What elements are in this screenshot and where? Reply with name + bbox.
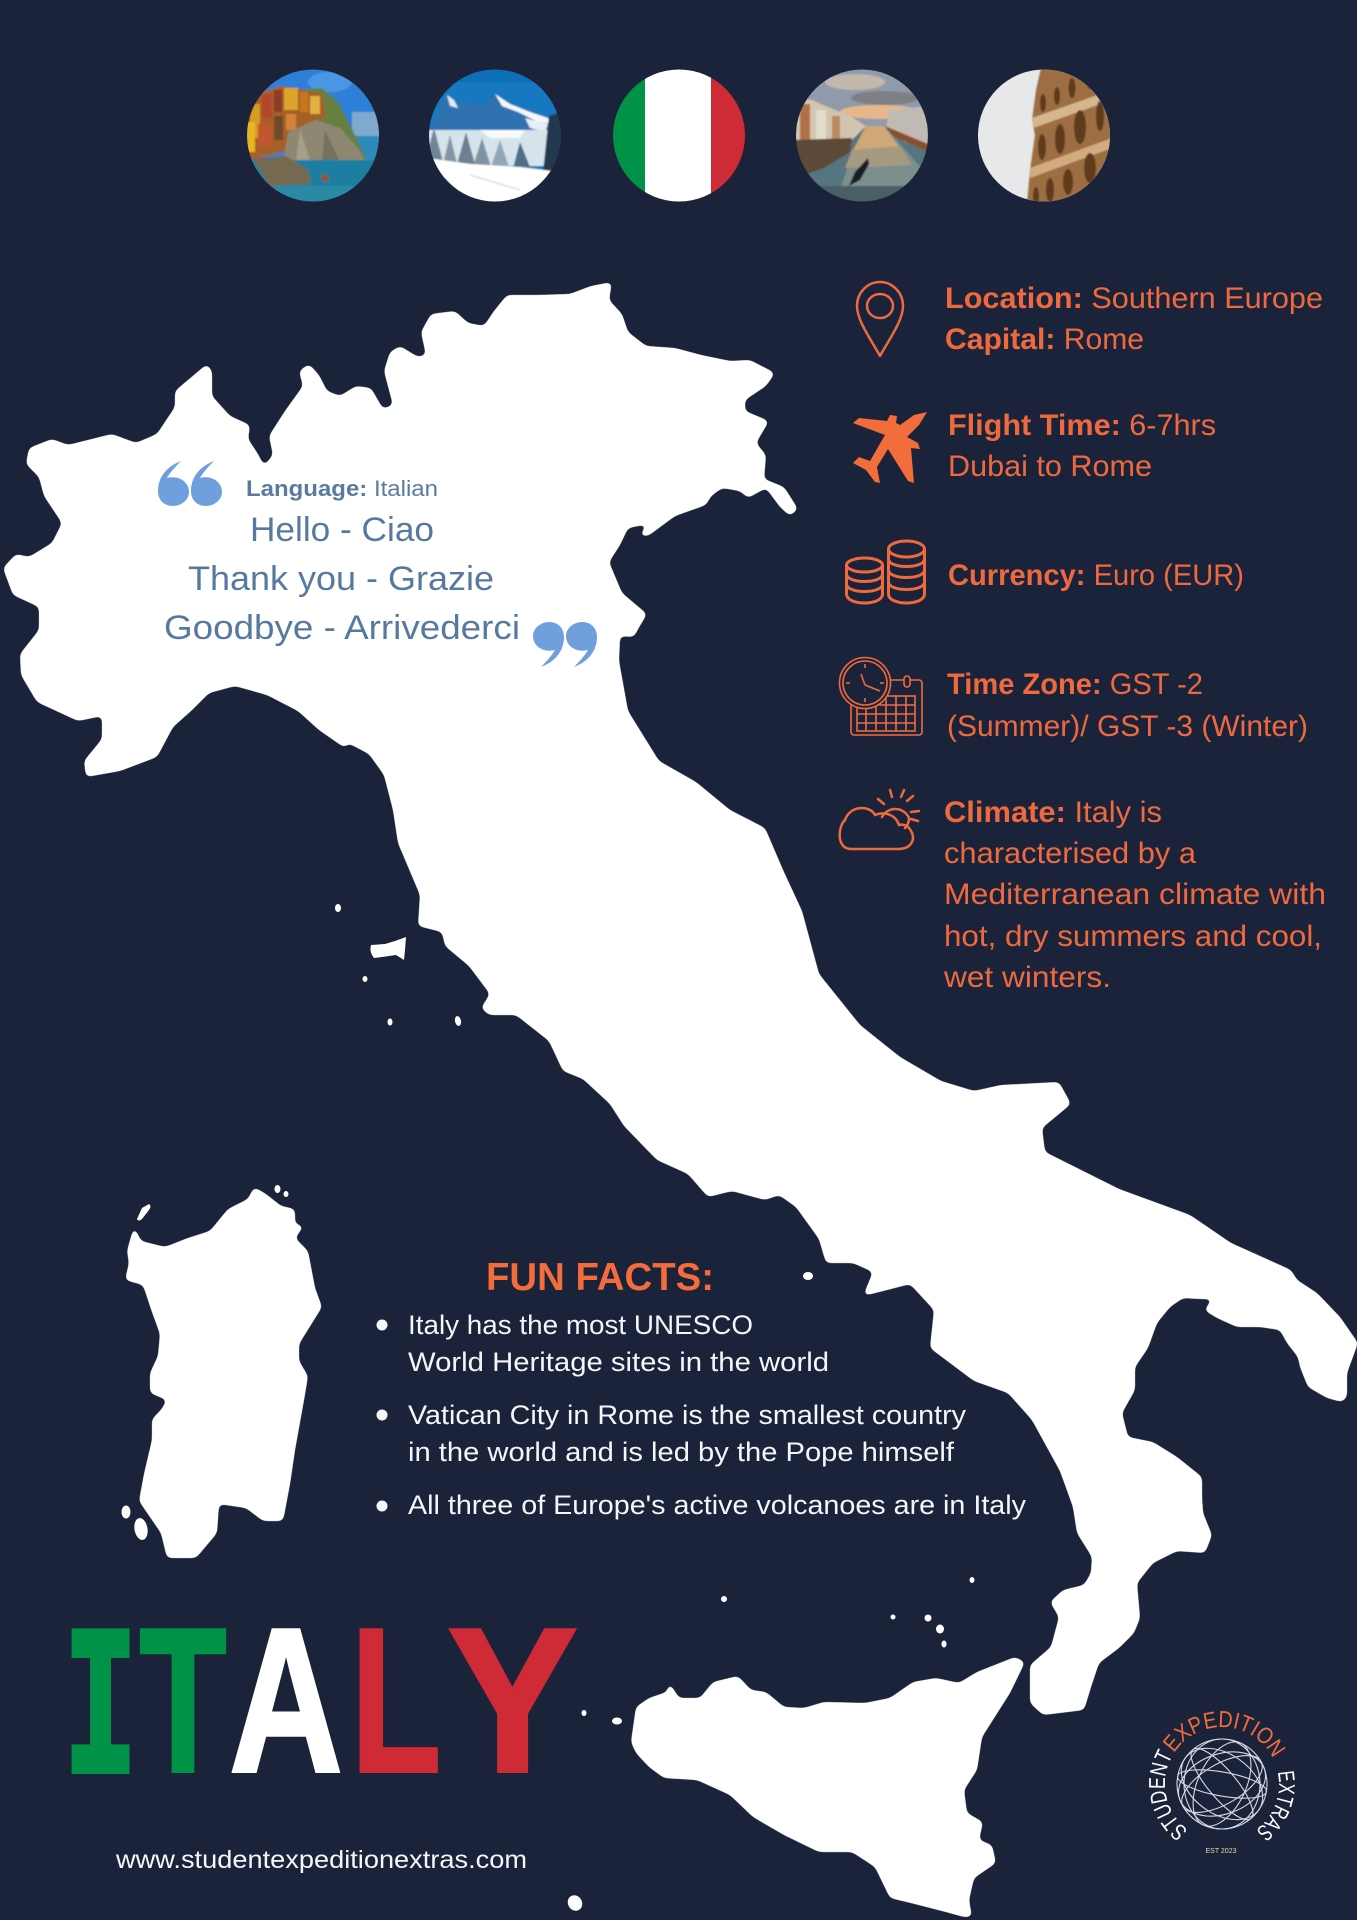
climate text: hot, dry summers and cool, bbox=[944, 920, 1322, 953]
circle: Colosseum bbox=[978, 70, 1110, 202]
circle: snowy mountains bbox=[429, 70, 561, 202]
circle: Cinque Terre village bbox=[247, 70, 379, 202]
title: ITALY: I bbox=[64, 1594, 137, 1835]
Sicily bbox=[631, 1657, 1025, 1917]
photo circles row bbox=[247, 70, 1110, 202]
facts column bbox=[840, 282, 1326, 994]
icon: cloud and sun bbox=[840, 790, 919, 849]
logo: Student Expedition Extras bbox=[1149, 1711, 1295, 1855]
title: ITALY: T bbox=[139, 1584, 227, 1816]
small islands bbox=[122, 904, 974, 1913]
title: ITALY: A bbox=[229, 1585, 343, 1815]
icon: coin stacks bbox=[846, 541, 924, 603]
flight time text: Dubai to Rome bbox=[948, 450, 1152, 483]
circle: Italian flag bbox=[613, 70, 745, 202]
thank you phrase: Thank you - Grazie bbox=[188, 560, 494, 598]
time zone text: Time Zone: GST -2 bbox=[947, 668, 1203, 701]
Sardinia bbox=[125, 1187, 322, 1558]
climate text: characterised by a bbox=[944, 837, 1196, 870]
title: ITALY: Y bbox=[447, 1585, 578, 1816]
closing quote mark bbox=[533, 622, 597, 667]
currency text: Currency: Euro (EUR) bbox=[948, 559, 1244, 592]
climate text: Climate: Italy is bbox=[944, 796, 1162, 829]
bullet: Vatican City: Vatican City in Rome is the smallest country bbox=[408, 1400, 967, 1430]
hello phrase: Hello - Ciao bbox=[250, 511, 434, 549]
icon: wireframe globe bbox=[1168, 1733, 1276, 1835]
bullet: Vatican City bbox=[376, 1400, 967, 1467]
fun facts heading: FUN FACTS: bbox=[486, 1256, 714, 1299]
climate text: Mediterranean climate with bbox=[944, 878, 1326, 911]
bullet: UNESCO: World Heritage sites in the world bbox=[408, 1347, 829, 1377]
location and capital text: Location: Southern Europe bbox=[945, 282, 1323, 315]
logo word: student: STUDENT bbox=[1149, 1748, 1186, 1840]
title: ITALY bbox=[64, 1584, 578, 1835]
language line: Language: Italian bbox=[246, 476, 438, 501]
circle: Venice canal bbox=[796, 70, 928, 202]
icon: aeroplane bbox=[853, 412, 927, 483]
bullet: UNESCO bbox=[376, 1310, 829, 1377]
location and capital text bbox=[945, 282, 1323, 356]
opening quote mark bbox=[158, 461, 222, 506]
location and capital text: Capital: Rome bbox=[945, 323, 1144, 356]
climate text: wet winters. bbox=[943, 961, 1111, 994]
time zone text bbox=[947, 668, 1308, 743]
bullet: Vatican City: in the world and is led by the Pope himself bbox=[408, 1437, 955, 1467]
logo word: extras: EXTRAS bbox=[1258, 1771, 1295, 1840]
title: ITALY: L bbox=[351, 1587, 441, 1816]
quote panel: language bbox=[158, 461, 597, 667]
icon: clock and calendar bbox=[840, 658, 922, 735]
time zone text: (Summer)/ GST -3 (Winter) bbox=[947, 710, 1308, 743]
logo tagline: EST 2023 bbox=[1205, 1848, 1237, 1855]
website url: www.studentexpeditionextras.com bbox=[115, 1846, 527, 1874]
climate text bbox=[943, 796, 1326, 994]
flight time text: Flight Time: 6-7hrs bbox=[948, 409, 1216, 442]
icon: location pin bbox=[857, 282, 903, 356]
flight time text bbox=[948, 409, 1216, 483]
fun facts panel bbox=[376, 1256, 1027, 1520]
goodbye phrase: Goodbye - Arrivederci bbox=[164, 609, 520, 647]
mainland Italy bbox=[3, 282, 1357, 1715]
bullet: volcanoes: All three of Europe's active volcanoes are in Italy bbox=[408, 1490, 1027, 1520]
logo word: expedition: EXPEDITION bbox=[1162, 1711, 1286, 1757]
bullet: UNESCO: Italy has the most UNESCO bbox=[408, 1310, 753, 1340]
